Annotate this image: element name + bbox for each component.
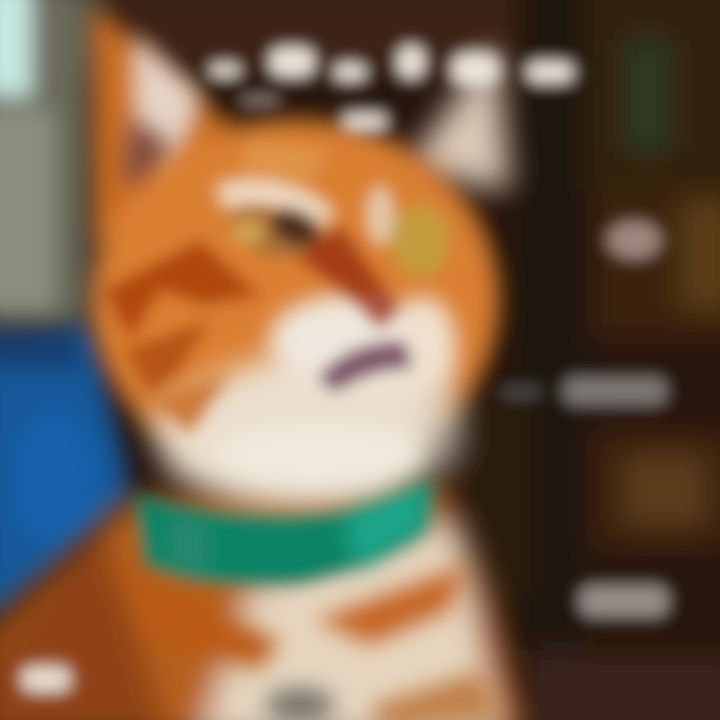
cat nose and mouth: [318, 292, 412, 392]
blurred corner label: [20, 665, 72, 693]
blurred title text: [208, 44, 575, 130]
cat eyes: [223, 185, 450, 276]
background: blue cushion: [0, 325, 130, 620]
cat head: [92, 120, 498, 508]
background: window highlight: [0, 0, 55, 310]
blurred side labels: [500, 220, 670, 618]
cat body markings: [120, 565, 500, 720]
teal collar: [135, 478, 432, 586]
cat face markings: [105, 140, 425, 485]
cat ears: [92, 5, 510, 260]
cat body: [0, 480, 525, 720]
